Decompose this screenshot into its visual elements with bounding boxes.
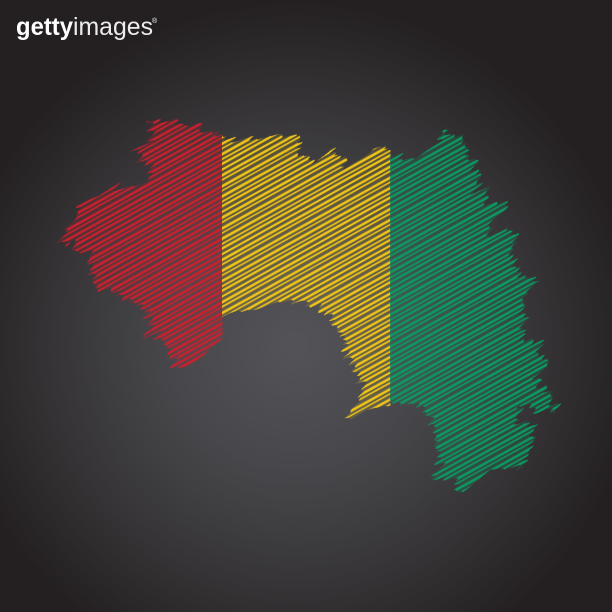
map of Guinea in scribbled flag colours (56, 118, 562, 492)
logo: gettyimages wordmark: ® (152, 17, 158, 25)
logo: gettyimages wordmark: getty (16, 13, 73, 41)
logo: gettyimages wordmark (16, 13, 158, 41)
yellow scribble region (222, 134, 390, 420)
red scribble region (56, 118, 222, 368)
logo: gettyimages wordmark: images (73, 13, 153, 41)
green scribble region (390, 129, 562, 492)
